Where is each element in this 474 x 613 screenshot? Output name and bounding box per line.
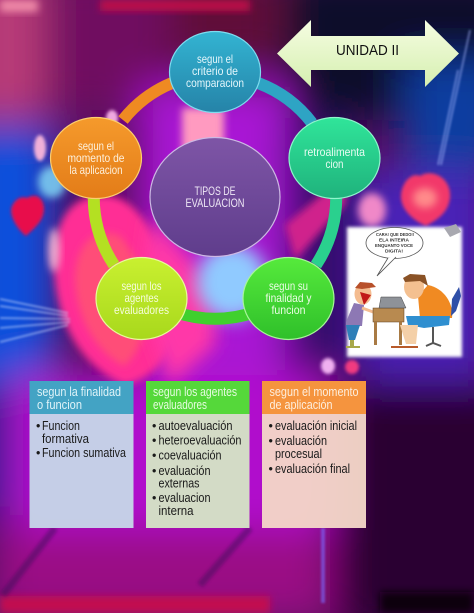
- speech bubble: ENQUANTO VOCE: [375, 243, 413, 248]
- bullet list: •: [36, 419, 40, 433]
- node: segun su finalidad y funcion: segun su: [269, 279, 308, 293]
- panel: segun los agentes evaluadores: [146, 381, 250, 528]
- panel: segun la finalidad o funcion: o funcion: [37, 398, 82, 412]
- bullet list: •: [268, 419, 273, 433]
- bullet list: Funcion sumativa: [42, 446, 126, 460]
- ring segment: blue: [258, 83, 312, 123]
- cycle ring: [94, 83, 336, 319]
- node: retroalimentacion: [289, 118, 380, 198]
- bullet list: heteroevaluación: [158, 434, 242, 448]
- bullet list: [152, 419, 242, 518]
- center circle: TIPOS DE EVALUACION: [150, 138, 280, 256]
- center circle: TIPOS DE EVALUACION: TIPOS DE: [194, 184, 236, 198]
- node: segun el momento de la aplicacion: momento de: [68, 151, 125, 165]
- panel: segun los agentes evaluadores: segun los agentes: [153, 385, 237, 399]
- cartoon illustration: [346, 224, 462, 357]
- bullet list: •: [152, 491, 156, 505]
- bullet list: autoevaluación: [158, 419, 233, 433]
- small standing character: [346, 282, 376, 348]
- bullet list: interna: [158, 504, 194, 518]
- speech bubble: [366, 228, 423, 276]
- node: segun el momento de la aplicacion: segun el: [78, 139, 114, 153]
- double arrow: UNIDAD II: UNIDAD II: [336, 42, 399, 59]
- large seated character: [391, 274, 461, 348]
- panel: segun el momento de aplicacion: segun el momento: [270, 385, 359, 399]
- ring segment: orange: [123, 83, 172, 120]
- node: segun los agentes evaluadores: evaluadores: [114, 303, 169, 317]
- node: retroalimentacion: cion: [326, 157, 344, 171]
- node: segun su finalidad y funcion: finalidad y: [266, 291, 312, 305]
- bullet list: externas: [158, 476, 200, 490]
- speech bubble: DIGITA!: [385, 248, 404, 254]
- ring segment: yellow green: [94, 190, 114, 265]
- double arrow: UNIDAD II: [277, 20, 459, 87]
- bullet list: [36, 419, 126, 460]
- white picture frame: [347, 227, 462, 357]
- bullet list: •: [152, 464, 156, 478]
- node: segun el criterio de comparacion: [170, 32, 260, 112]
- bullet list: •: [36, 446, 40, 460]
- bullet list: procesual: [275, 447, 322, 461]
- node: segun los agentes evaluadores: [96, 258, 187, 340]
- bullet list: evaluación: [275, 434, 327, 448]
- bullet list: •: [152, 448, 156, 462]
- bullet list: evaluación: [158, 464, 211, 478]
- ring segment: green: [175, 312, 255, 319]
- bullet list: •: [152, 419, 156, 433]
- node: segun el momento de la aplicacion: [50, 118, 142, 198]
- node: segun los agentes evaluadores: segun los: [122, 279, 162, 293]
- bullet list: •: [268, 434, 273, 448]
- bullet list: formativa: [42, 432, 89, 446]
- center circle: TIPOS DE EVALUACION: EVALUACION: [186, 196, 244, 210]
- node: segun los agentes evaluadores: agentes: [124, 291, 158, 305]
- bullet list: evaluación inicial: [275, 419, 357, 433]
- bullet list: evaluación final: [275, 462, 350, 476]
- bullet list: •: [152, 434, 156, 448]
- bullet list: [268, 419, 357, 476]
- panel: segun el momento de aplicacion: de aplicación: [270, 398, 333, 412]
- node: segun el criterio de comparacion: segun el: [197, 52, 233, 66]
- ring segment: teal green: [316, 190, 336, 265]
- panel: segun el momento de aplicacion: [262, 381, 366, 528]
- node: retroalimentacion: retroalimenta: [304, 145, 365, 159]
- node: segun el criterio de comparacion: criterio de: [192, 64, 238, 78]
- speech bubble: CARA! QUE DEDO!!: [376, 232, 414, 237]
- panel: segun la finalidad o funcion: segun la finalidad: [37, 385, 121, 399]
- bullet list: evaluacion: [158, 491, 211, 505]
- speech bubble: ELA INTEIRA: [379, 238, 410, 242]
- node: segun su finalidad y funcion: funcion: [272, 303, 306, 317]
- node: segun su finalidad y funcion: [243, 258, 334, 340]
- bullet list: Funcion: [42, 419, 80, 433]
- node: segun el criterio de comparacion: comparacion: [186, 76, 244, 90]
- panel: segun los agentes evaluadores: evaluadores: [153, 398, 207, 412]
- desk and typewriter: [373, 297, 406, 345]
- panel: segun la finalidad o funcion: [30, 381, 134, 528]
- icon: grey cube: [444, 224, 461, 237]
- node: segun el momento de la aplicacion: la aplicacion: [70, 163, 122, 177]
- bullet list: coevaluación: [158, 448, 222, 462]
- bullet list: •: [268, 462, 273, 476]
